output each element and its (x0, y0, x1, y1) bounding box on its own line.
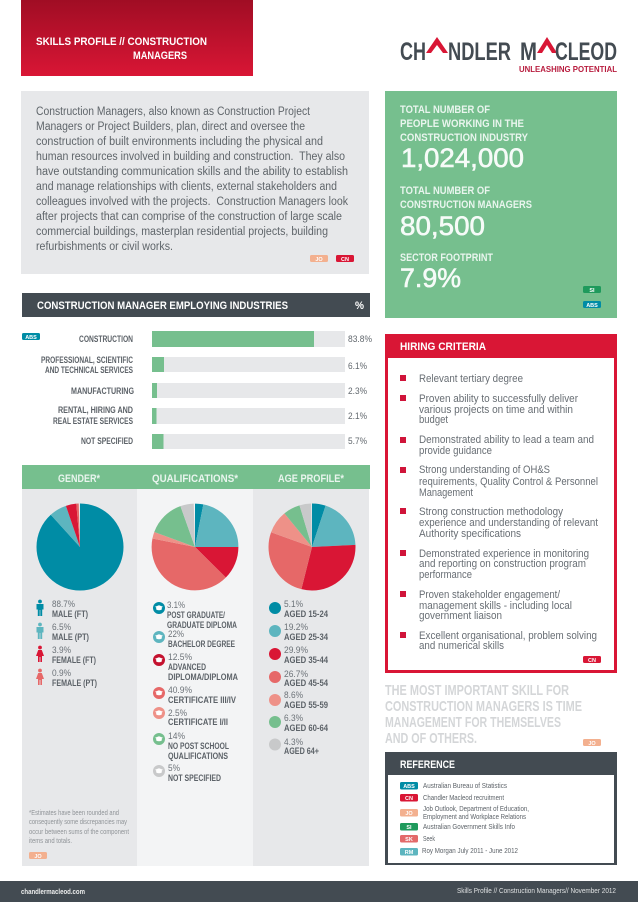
title banner: SKILLS PROFILE // CONSTRUCTION (36, 36, 207, 48)
criteria list: performance (419, 569, 472, 581)
panel: age profile (253, 489, 369, 866)
panel: introduction: after projects that can comprise of the construction of large scale (36, 211, 342, 223)
bar chart: employing industries: REAL ESTATE SERVICES (53, 416, 133, 426)
legend: age profile: 6.3% (284, 713, 303, 724)
logo: Chandler Macleod: UNLEASHING POTENTIAL (519, 64, 617, 74)
panel: introduction: have outstanding communication skills and the ability to establish (36, 166, 348, 178)
panel: key statistics: CONSTRUCTION INDUSTRY (400, 132, 529, 144)
bar chart: employing industries: AND TECHNICAL SERVICES (45, 365, 133, 375)
panel: hiring criteria: CN (588, 658, 596, 664)
heading: employing industries (22, 293, 370, 317)
bar chart: employing industries: PROFESSIONAL, SCIENTIFIC (41, 355, 133, 365)
criteria list: and numerical skills (419, 640, 505, 652)
logo: Chandler Macleod: NDLER (448, 38, 511, 66)
footer: Skills Profile // Construction Managers// November 2012 (457, 886, 616, 895)
legend: age profile: 19.2% (284, 622, 308, 633)
icon: female part time (36, 669, 44, 685)
footer: chandlermacleod.com (21, 887, 85, 896)
heading: gender, qualifications, age profile (22, 465, 370, 489)
icon: male part time (36, 623, 44, 639)
criteria list: requirements, Quality Control & Personnel (419, 476, 598, 488)
criteria list: Proven ability to successfully deliver (419, 393, 578, 405)
icon: bachelor degree (153, 631, 165, 643)
panel: qualifications: BACHELOR DEGREE (168, 639, 235, 649)
panel: key statistics: CONSTRUCTION MANAGERS (400, 199, 532, 211)
footer (0, 881, 638, 902)
bar chart: employing industries (22, 331, 372, 449)
bar chart: employing industries: 6.1% (348, 361, 367, 372)
panel: reference: RM (405, 850, 414, 856)
legend: age profile: 26.7% (284, 669, 308, 680)
panel: reference: JO (405, 811, 413, 817)
legend: age profile: 4.3% (284, 737, 303, 748)
panel: gender: 88.7% (52, 599, 75, 610)
icon: not specified (153, 765, 165, 777)
bar chart: employing industries: MANUFACTURING (71, 386, 134, 396)
legend: age profile: AGED 15-24 (284, 609, 328, 619)
pie chart: age profile (290, 525, 334, 569)
criteria list: Strong construction methodology (419, 506, 564, 518)
panel: gender: FEMALE (PT) (52, 678, 97, 688)
callout: most important skill: JO (588, 741, 596, 747)
panel: gender: 6.5% (52, 622, 71, 633)
panel: reference: Job Outlook, Department of Education, (423, 804, 529, 813)
panel: key statistics: 80,500 (400, 211, 485, 241)
criteria list: budget (419, 414, 448, 426)
criteria list (419, 373, 598, 652)
panel: introduction: refurbishments or civil works. (36, 241, 173, 253)
panel: reference: SI (406, 825, 412, 831)
panel: key statistics: SI (589, 288, 595, 294)
icon: female full time (36, 646, 44, 662)
criteria bullets (400, 375, 406, 638)
panel: key statistics: 7.9% (400, 263, 461, 293)
panel: qualifications: 40.9% (168, 685, 192, 696)
panel: reference: SK (405, 837, 413, 843)
panel: introduction (21, 91, 369, 274)
panel: reference: CN (405, 796, 413, 802)
panel: reference: Roy Morgan July 2011 - June 2012 (422, 846, 518, 855)
pie chart: qualifications (173, 525, 217, 569)
footnote: consequently some discrepancies may (29, 817, 127, 826)
logo: Chandler Macleod: M (520, 38, 537, 66)
panel: qualifications: QUALIFICATIONS (168, 751, 228, 761)
legend: age profile (269, 599, 328, 756)
panel: introduction: colleagues involved with the projects. Construction Managers look (36, 196, 348, 208)
bar chart: employing industries: NOT SPECIFIED (81, 436, 133, 446)
panel: qualifications: 22% (168, 629, 184, 640)
bar chart: employing industries: 2.3% (348, 386, 367, 397)
panel: introduction: human resources involved in building and construction. They also (36, 151, 345, 163)
legend: age profile: AGED 45-54 (284, 678, 328, 688)
panel: qualifications: NOT SPECIFIED (168, 773, 221, 783)
legend: age profile: AGED 35-44 (284, 655, 328, 665)
criteria list: Relevant tertiary degree (419, 373, 523, 385)
panel: key statistics: PEOPLE WORKING IN THE (400, 118, 524, 130)
criteria list: management skills - including local (419, 600, 572, 612)
panel: qualifications: CERTIFICATE I/II (168, 717, 228, 727)
criteria list: and reporting on construction program (419, 558, 586, 570)
heading: gender, qualifications, age profile: QUALIFICATIONS* (152, 473, 239, 485)
bar chart: employing industries: 83.8% (348, 334, 372, 345)
panel: gender: 0.9% (52, 668, 71, 679)
panel: hiring criteria (385, 334, 617, 673)
panel: introduction: JO (315, 257, 323, 263)
title banner (21, 0, 253, 76)
panel: reference: ABS (403, 784, 415, 790)
panel: key statistics: 1,024,000 (401, 143, 524, 173)
panel: introduction: Managers or Project Builders, plan, direct and oversee the (36, 121, 305, 133)
criteria list: Excellent organisational, problem solving (419, 630, 597, 642)
footnote (29, 808, 129, 860)
panel: qualifications: POST GRADUATE/ (167, 610, 225, 620)
bar chart: employing industries: 2.1% (348, 411, 367, 422)
panel: introduction: and manage relationships with clients, external stakeholders and (36, 181, 337, 193)
logo: Chandler Macleod (400, 37, 617, 74)
panel: reference: Seek (423, 834, 435, 843)
bar chart: employing industries: CONSTRUCTION (79, 334, 133, 344)
panel: introduction: Construction Managers, also known as Construction Project (36, 106, 311, 118)
panel: qualifications: 12.5% (168, 652, 192, 663)
footnote: occur between sums of the component (29, 827, 129, 836)
panel: gender: MALE (PT) (52, 632, 89, 642)
panel: introduction: construction of built environments including the physical and (36, 136, 323, 148)
footnote: items and totals. (29, 836, 72, 845)
panel: key statistics: TOTAL NUMBER OF (400, 185, 490, 197)
panel: key statistics: ABS (586, 303, 598, 309)
panel: hiring criteria: HIRING CRITERIA (400, 341, 486, 353)
panel: qualifications: CERTIFICATE III/IV (168, 695, 236, 705)
criteria list: Strong understanding of OH&S (419, 464, 550, 476)
panel: key statistics: TOTAL NUMBER OF (400, 104, 490, 116)
legend: age profile: AGED 55-59 (284, 700, 328, 710)
legend: age profile: 8.6% (284, 690, 303, 701)
criteria list: Demonstrated ability to lead a team and (419, 434, 594, 446)
panel: gender (22, 489, 137, 866)
panel: qualifications: 2.5% (168, 708, 187, 719)
panel: qualifications (137, 489, 253, 866)
legend: age profile: 5.1% (284, 599, 303, 610)
panel: reference: Australian Government Skills Info (423, 822, 515, 831)
panel: gender: MALE (FT) (52, 609, 88, 619)
icon: certificate III/IV (153, 687, 165, 699)
callout: most important skill (385, 682, 601, 747)
criteria list: Authority specifications (419, 528, 522, 540)
criteria list: Management (419, 487, 473, 499)
callout: most important skill: AND OF OTHERS. (385, 730, 477, 747)
panel: qualifications: ADVANCED (168, 662, 206, 672)
legend: age profile: AGED 25-34 (284, 632, 328, 642)
criteria list: various projects on time and within (419, 404, 573, 416)
title banner: MANAGERS (133, 50, 187, 62)
heading: employing industries: CONSTRUCTION MANAGER EMPLOYING INDUSTRIES (37, 300, 288, 312)
legend: age profile: AGED 64+ (284, 746, 319, 756)
panel: reference (385, 752, 617, 865)
icon: advanced diploma (153, 654, 165, 666)
criteria list: provide guidance (419, 445, 492, 457)
bar chart: employing industries: ABS (25, 335, 37, 341)
panel: key statistics: SECTOR FOOTPRINT (400, 252, 493, 264)
panel: qualifications: 14% (168, 731, 185, 742)
heading: gender, qualifications, age profile: AGE PROFILE* (278, 473, 345, 485)
panel: gender: FEMALE (FT) (52, 655, 96, 665)
criteria list: Proven stakeholder engagement/ (419, 589, 560, 601)
logo: Chandler Macleod: CH (400, 38, 426, 66)
bar chart: employing industries: 5.7% (348, 436, 367, 447)
criteria list: Demonstrated experience in monitoring (419, 548, 589, 560)
panel: reference: Chandler Macleod recruitment (423, 793, 504, 802)
pie chart: gender (58, 525, 102, 569)
icon: post graduate (153, 602, 165, 614)
panel: qualifications: NO POST SCHOOL (168, 741, 229, 751)
panel: reference: Employment and Workplace Relations (423, 812, 526, 821)
panel: reference: REFERENCE (400, 759, 455, 771)
panel: reference: Australian Bureau of Statistics (423, 781, 507, 790)
callout: most important skill: THE MOST IMPORTANT SKILL FOR (385, 682, 569, 699)
panel: introduction: CN (341, 257, 349, 263)
heading: gender, qualifications, age profile: GENDER* (58, 473, 101, 485)
icon: no post school (153, 733, 165, 745)
legend: age profile: 29.9% (284, 645, 308, 656)
panel: qualifications: 3.1% (167, 600, 185, 611)
icon: certificate I/II (153, 707, 165, 719)
footnote: JO (34, 854, 42, 860)
heading: employing industries: % (355, 300, 364, 312)
criteria list: government liaison (419, 610, 502, 622)
criteria list: experience and understanding of relevant (419, 517, 598, 529)
icon: male full time (36, 600, 44, 616)
panel: qualifications: DIPLOMA/DIPLOMA (168, 672, 238, 682)
legend: age profile: AGED 60-64 (284, 723, 328, 733)
panel: introduction: commercial buildings, masterplan residential projects, building (36, 226, 328, 238)
footnote: *Estimates have been rounded and (29, 808, 119, 817)
bar chart: employing industries: RENTAL, HIRING AND (58, 405, 133, 415)
callout: most important skill: MANAGEMENT FOR THEMSELVES (385, 714, 561, 731)
panel: gender: 3.9% (52, 645, 71, 656)
panel: qualifications: GRADUATE DIPLOMA (167, 620, 237, 630)
panel: key statistics (385, 91, 617, 318)
panel: qualifications: 5% (168, 763, 180, 774)
